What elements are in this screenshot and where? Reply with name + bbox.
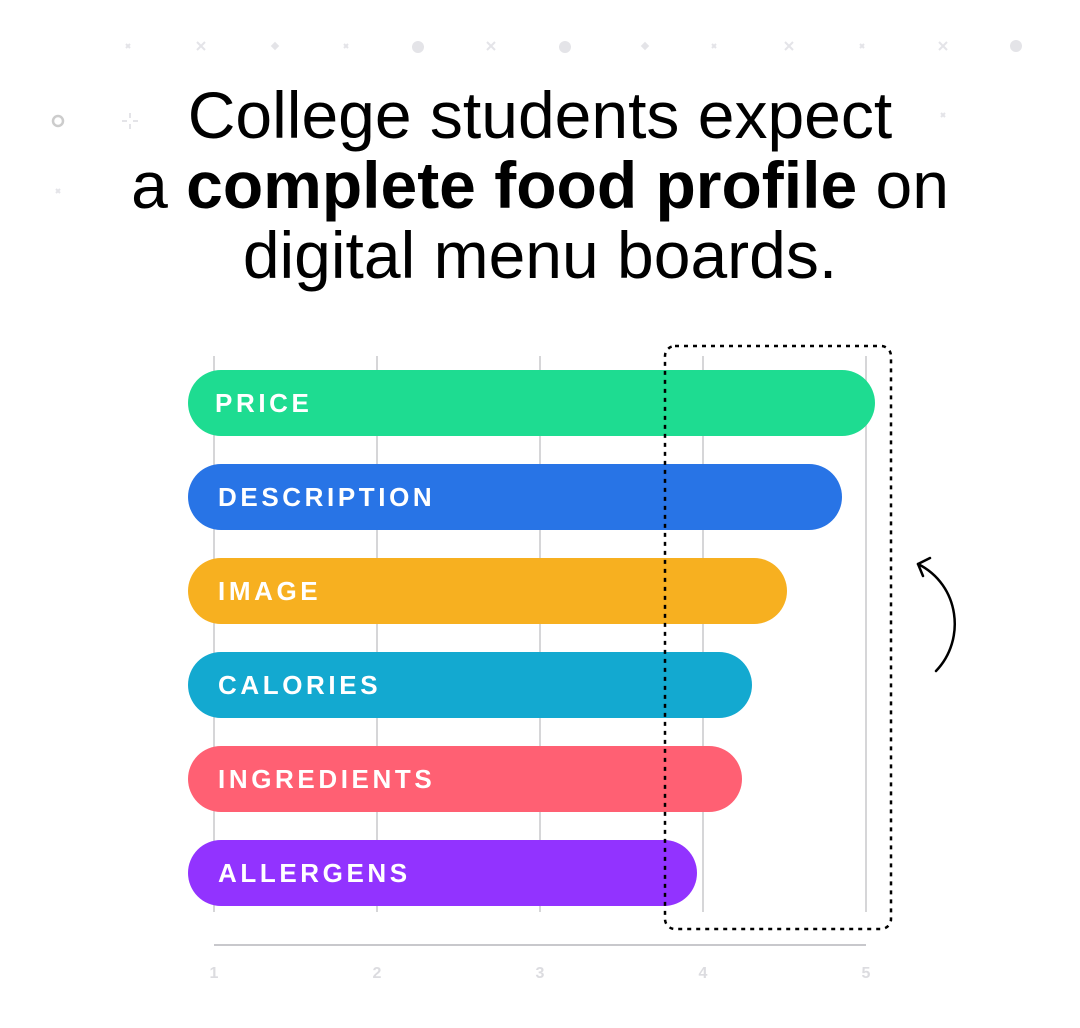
- title: [131, 78, 949, 292]
- arrow: [918, 558, 955, 671]
- title: a complete food profile on: [131, 148, 949, 222]
- bar: description: DESCRIPTION: [218, 482, 435, 512]
- bar: allergens: ALLERGENS: [218, 858, 411, 888]
- bar: ingredients: INGREDIENTS: [218, 764, 435, 794]
- dashed highlight box: [665, 346, 891, 929]
- bar: price: [188, 370, 875, 436]
- bar: ingredients: [188, 746, 742, 812]
- bar: image: IMAGE: [218, 576, 321, 606]
- title: College students expect: [188, 78, 892, 152]
- axis labels: 3: [536, 965, 545, 982]
- axis labels: 2: [373, 965, 382, 982]
- bar: calories: [188, 652, 752, 718]
- bar: price: PRICE: [215, 388, 312, 418]
- bar: description: [188, 464, 842, 530]
- axis labels: 1: [210, 965, 219, 982]
- decorative dots row: [52, 40, 1022, 194]
- title: digital menu boards.: [243, 218, 837, 292]
- axis labels: 4: [699, 965, 708, 982]
- bar: allergens: [188, 840, 697, 906]
- axis labels: 5: [862, 965, 871, 982]
- bar: calories: CALORIES: [218, 670, 381, 700]
- bar: image: [188, 558, 787, 624]
- axis labels: [210, 965, 871, 982]
